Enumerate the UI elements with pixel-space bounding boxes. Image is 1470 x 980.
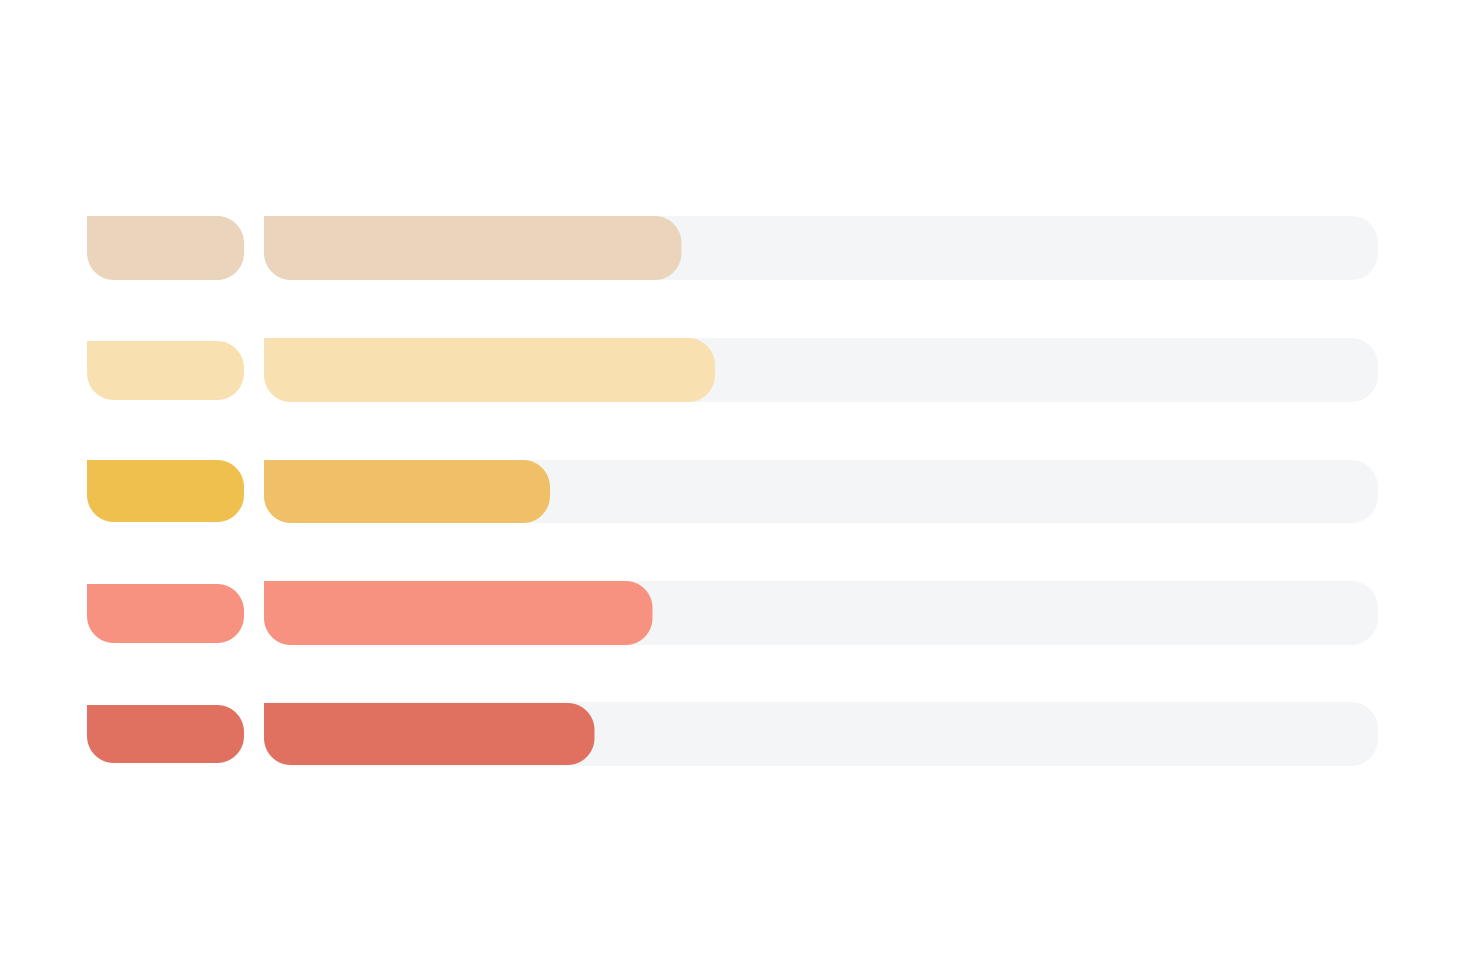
row 2: pale yellow [87, 338, 1378, 402]
row 4: salmon [87, 581, 1378, 645]
row 5: red [87, 702, 1378, 766]
row 1: beige [87, 216, 1378, 280]
row 3: amber [87, 460, 1378, 523]
